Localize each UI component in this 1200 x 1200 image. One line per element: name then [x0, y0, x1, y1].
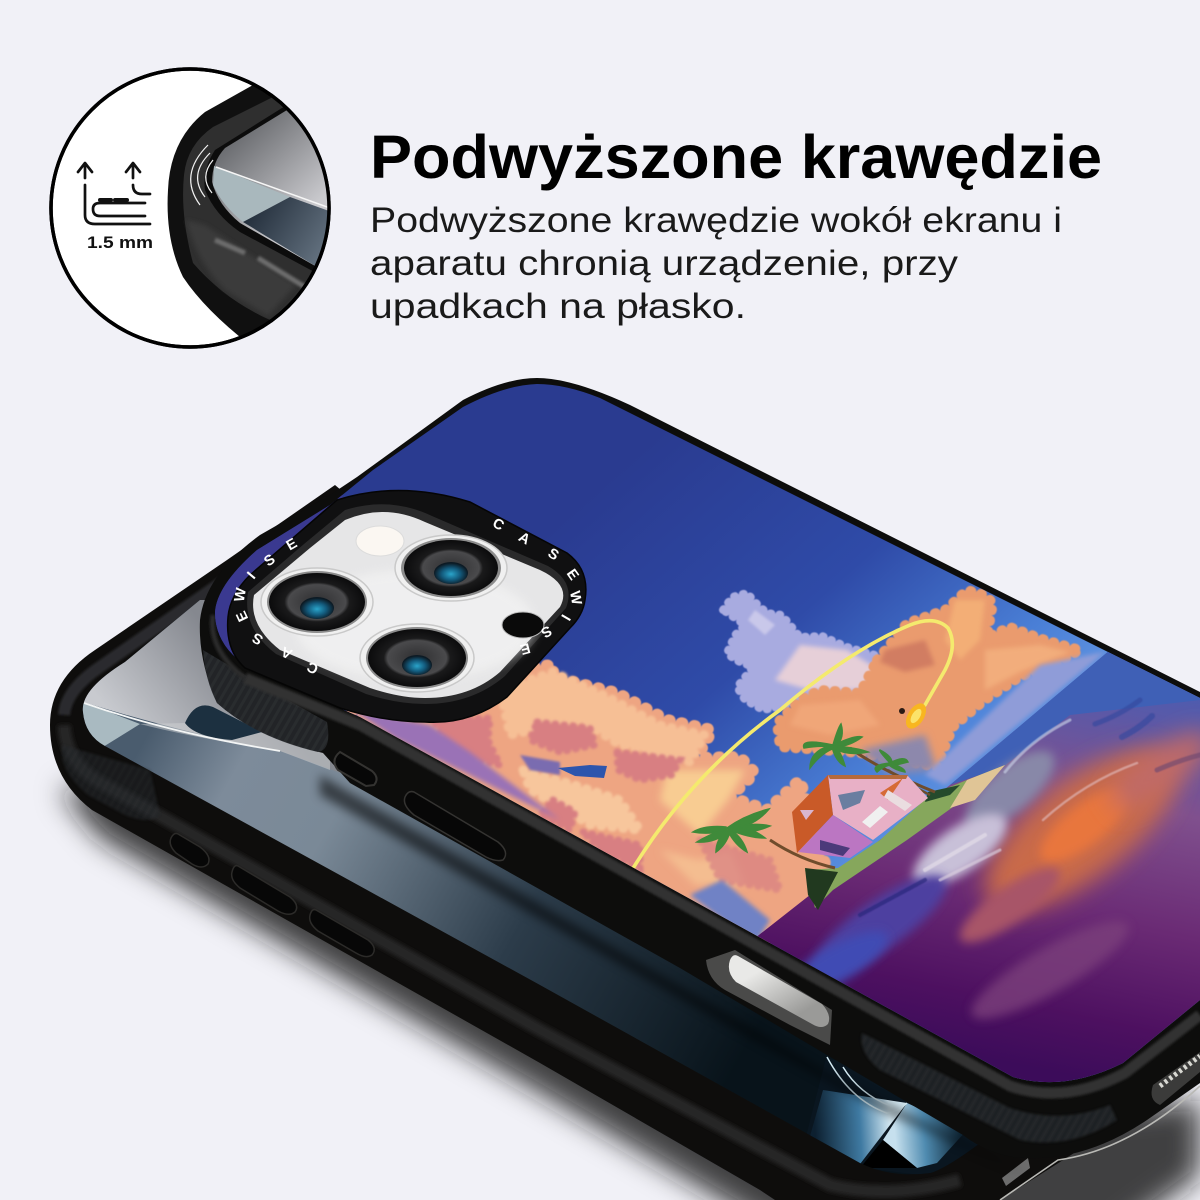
- microphone hole: [502, 612, 544, 638]
- description text: upadkach na płasko.: [370, 287, 746, 326]
- icon label: 1.5 mm: 1.5 mm: [87, 233, 153, 252]
- shadow of upper phone on lower screen: [320, 775, 1030, 1175]
- inset glass: [212, 110, 328, 266]
- title: Podwyższone krawędzie: [370, 123, 1102, 191]
- lower phone charging port: [1002, 1158, 1030, 1186]
- ring branding letters: C: [490, 515, 507, 535]
- ring branding letters: A: [278, 642, 295, 662]
- ring branding letters: S: [261, 551, 279, 570]
- ring branding letters: C: [304, 657, 321, 677]
- lower phone top rim: [64, 503, 330, 715]
- left cloud purple shadow: [350, 708, 560, 820]
- house: [828, 775, 928, 840]
- ring branding letters: E: [284, 535, 300, 554]
- ring branding letters: E: [518, 639, 532, 657]
- lower phone frame: [50, 485, 1110, 1200]
- ring branding letters: E: [563, 566, 582, 584]
- inset circle: raised edge detail: [51, 69, 340, 347]
- left cloud pink patches: [433, 718, 780, 890]
- ring branding letters: I: [557, 611, 573, 623]
- lens left: [261, 568, 373, 636]
- lower phone side buttons: [170, 834, 374, 957]
- far horizon lavender band: [925, 652, 1105, 785]
- upper phone frame: [200, 378, 1200, 1158]
- camera inner bevel: [247, 504, 569, 704]
- upper phone switch: [334, 752, 377, 786]
- ring branding letters: A: [516, 529, 533, 549]
- upper phone rim highlight: [245, 678, 1200, 1093]
- lower phone case: [50, 450, 1110, 1200]
- camera island: [228, 490, 586, 722]
- upper phone case: [200, 370, 1200, 1200]
- description text: Podwyższone krawędzie wokół ekranu i: [370, 201, 1062, 240]
- upper phone carbon corner pad: [203, 650, 328, 752]
- flash: [356, 526, 404, 556]
- lavender cloud: [723, 593, 907, 710]
- sky: [200, 370, 1200, 1100]
- description text: aparatu chronią urządzenie, przy: [370, 244, 959, 283]
- palm leaves: [693, 724, 908, 852]
- left cloud light patches: [500, 672, 705, 762]
- lower phone carbon corner pad: [62, 745, 160, 820]
- lens top right: [395, 535, 507, 601]
- ring branding letters: S: [538, 622, 554, 641]
- ring branding letters: E: [233, 608, 252, 624]
- ring branding letters: W: [232, 587, 250, 603]
- inset rim: [204, 108, 313, 270]
- right cloud: [777, 590, 1105, 785]
- inset reflection: [215, 240, 305, 287]
- sea: [750, 650, 1200, 1100]
- sky gap in cloud: [558, 765, 607, 778]
- artwork on case back: [200, 370, 1200, 1100]
- camera plate: [253, 512, 563, 698]
- lens bottom: [360, 624, 474, 692]
- inset raised-edge arcs: [191, 145, 213, 205]
- drop shadow under phones: [60, 760, 1200, 1200]
- ring branding letters: S: [249, 629, 266, 647]
- distant blue clouds below: [690, 880, 770, 945]
- ring branding letters: I: [244, 569, 259, 583]
- comet trail: [632, 621, 952, 870]
- kame house island: [693, 724, 1005, 910]
- palm trunks: [770, 748, 935, 868]
- inset phone corner: [168, 86, 328, 336]
- upper phone silver edge: [1000, 1086, 1200, 1200]
- upper phone speaker grille: [1152, 1052, 1200, 1105]
- description text: [370, 201, 1062, 326]
- camera ring: [228, 490, 586, 722]
- ring branding letters: S: [545, 546, 562, 564]
- upper phone bottom carbon pad: [861, 1033, 1117, 1142]
- left cloud: [340, 665, 830, 945]
- upper phone volume button: [404, 792, 506, 861]
- ring branding letters: [232, 515, 584, 677]
- lower phone front rim: [64, 725, 960, 1191]
- upper phone metal button: [706, 950, 832, 1045]
- ring branding letters: W: [566, 590, 584, 606]
- lower phone screen: [82, 600, 978, 1174]
- icon: raised edge diagram: [78, 163, 150, 224]
